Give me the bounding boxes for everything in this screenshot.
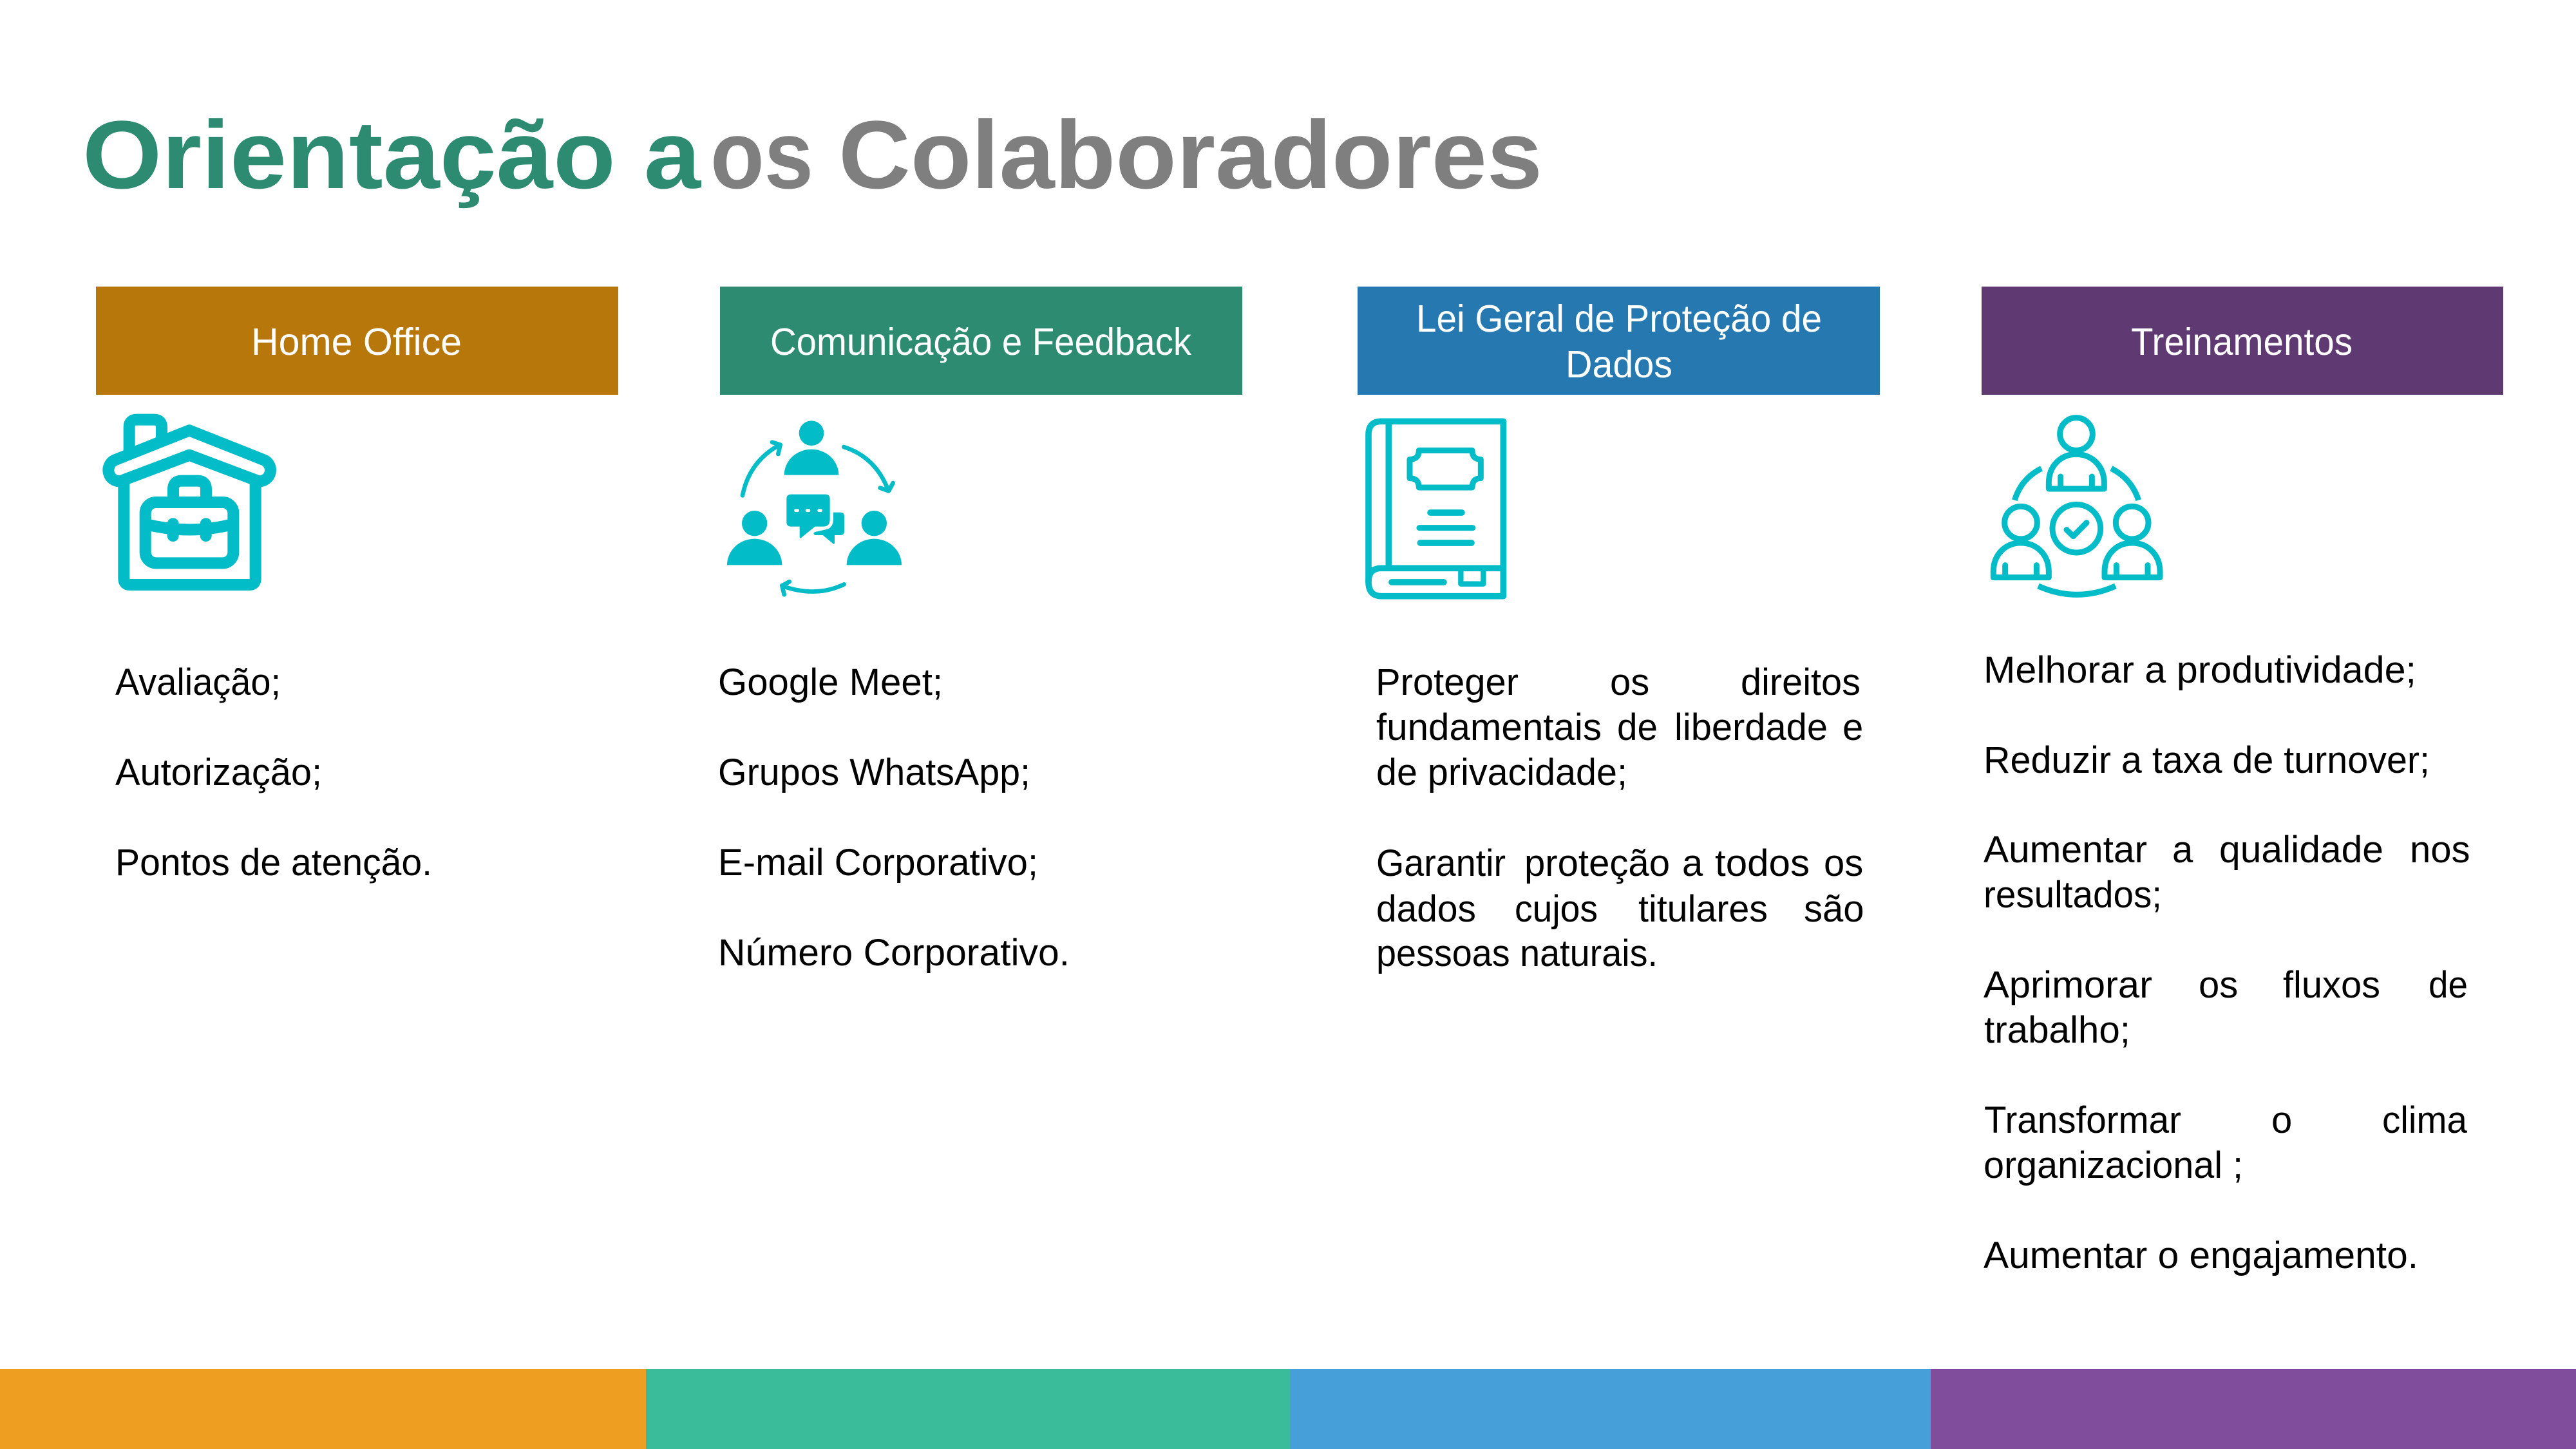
- text: training goals: [1984, 649, 2470, 1276]
- text: lgpd purposes: a: [1682, 842, 1703, 884]
- icon: house with briefcase: [108, 420, 270, 585]
- text: communication channels: [718, 661, 1070, 974]
- heading: treinamentos: [1982, 287, 2503, 395]
- text: lgpd purposes: são: [1804, 888, 1864, 930]
- text: training goals: os: [2199, 964, 2238, 1006]
- text: communication channels: Grupos WhatsApp;: [718, 752, 1030, 793]
- title: os: [710, 100, 813, 209]
- text: communication channels: Google Meet;: [718, 661, 943, 703]
- text: home office list: [115, 661, 432, 884]
- text: lgpd purposes: todos: [1715, 842, 1810, 884]
- text: training goals: a: [2172, 829, 2193, 871]
- heading: home office: [96, 287, 618, 395]
- title: Orientação a: [82, 100, 702, 209]
- heading: home office: Home Office: [251, 321, 462, 363]
- text: training goals: de: [2429, 964, 2468, 1006]
- text: home office list: Avaliação;: [115, 661, 281, 703]
- text: training goals: clima: [2382, 1099, 2468, 1141]
- text: training goals: o: [2271, 1099, 2292, 1141]
- text: lgpd purposes: pessoas naturais.: [1376, 933, 1658, 974]
- text: training goals: qualidade: [2219, 829, 2383, 871]
- text: lgpd purposes: os: [1610, 661, 1649, 703]
- text: communication channels: E-mail Corporativo;: [718, 842, 1038, 884]
- text: lgpd purposes: [1376, 661, 1864, 974]
- text: lgpd purposes: proteção: [1524, 842, 1670, 884]
- text: training goals: Aumentar: [1984, 829, 2147, 871]
- icon: team with checkmark: [1993, 418, 2160, 594]
- text: training goals: organizacional ;: [1984, 1144, 2243, 1186]
- heading: treinamentos: Treinamentos: [2131, 321, 2353, 363]
- text: lgpd purposes: Garantir: [1376, 842, 1506, 884]
- heading: lei geral de proteção de dados: Dados: [1566, 343, 1672, 386]
- text: lgpd purposes: e: [1842, 706, 1863, 748]
- text: training goals: Reduzir a taxa de turnover;: [1984, 739, 2430, 781]
- text: lgpd purposes: dados: [1376, 888, 1476, 930]
- text: training goals: fluxos: [2283, 964, 2380, 1006]
- text: training goals: Aumentar o engajamento.: [1984, 1235, 2418, 1276]
- panel: home office: [96, 287, 618, 884]
- text: communication channels: Número Corporativo.: [718, 932, 1070, 974]
- panel: lei geral de proteção de dados: [1358, 287, 1880, 974]
- heading: comunicação e feedback: [720, 287, 1242, 395]
- panel: comunicação e feedback: [718, 287, 1242, 974]
- text: lgpd purposes: fundamentais: [1376, 706, 1602, 748]
- text: lgpd purposes: cujos: [1515, 888, 1598, 930]
- text: lgpd purposes: de: [1617, 706, 1658, 748]
- text: training goals: nos: [2410, 829, 2470, 871]
- text: training goals: resultados;: [1984, 874, 2162, 916]
- icon: book: [1368, 421, 1503, 596]
- text: training goals: trabalho;: [1984, 1009, 2130, 1051]
- panel: treinamentos: [1982, 287, 2503, 1276]
- heading: lei geral de proteção de dados: [1358, 287, 1880, 395]
- text: training goals: Transformar: [1984, 1099, 2181, 1141]
- footer color band: [0, 1369, 2576, 1449]
- text: lgpd purposes: os: [1824, 842, 1863, 884]
- text: home office list: Autorização;: [115, 752, 322, 793]
- text: lgpd purposes: liberdade: [1674, 706, 1828, 748]
- heading: lei geral de proteção de dados: Lei Geral de Proteção de: [1416, 298, 1822, 340]
- title: Colaboradores: [838, 100, 1542, 209]
- text: home office list: Pontos de atenção.: [115, 842, 432, 884]
- text: training goals: Melhorar a produtividade;: [1984, 649, 2416, 691]
- heading: comunicação e feedback: Comunicação e Feedback: [770, 321, 1191, 363]
- text: lgpd purposes: direitos: [1741, 661, 1861, 703]
- icon: people communicating: [727, 421, 902, 594]
- title: [82, 100, 1542, 209]
- text: lgpd purposes: titulares: [1638, 888, 1768, 930]
- text: training goals: Aprimorar: [1984, 964, 2152, 1006]
- text: lgpd purposes: Proteger: [1376, 661, 1519, 703]
- text: lgpd purposes: de privacidade;: [1376, 752, 1627, 793]
